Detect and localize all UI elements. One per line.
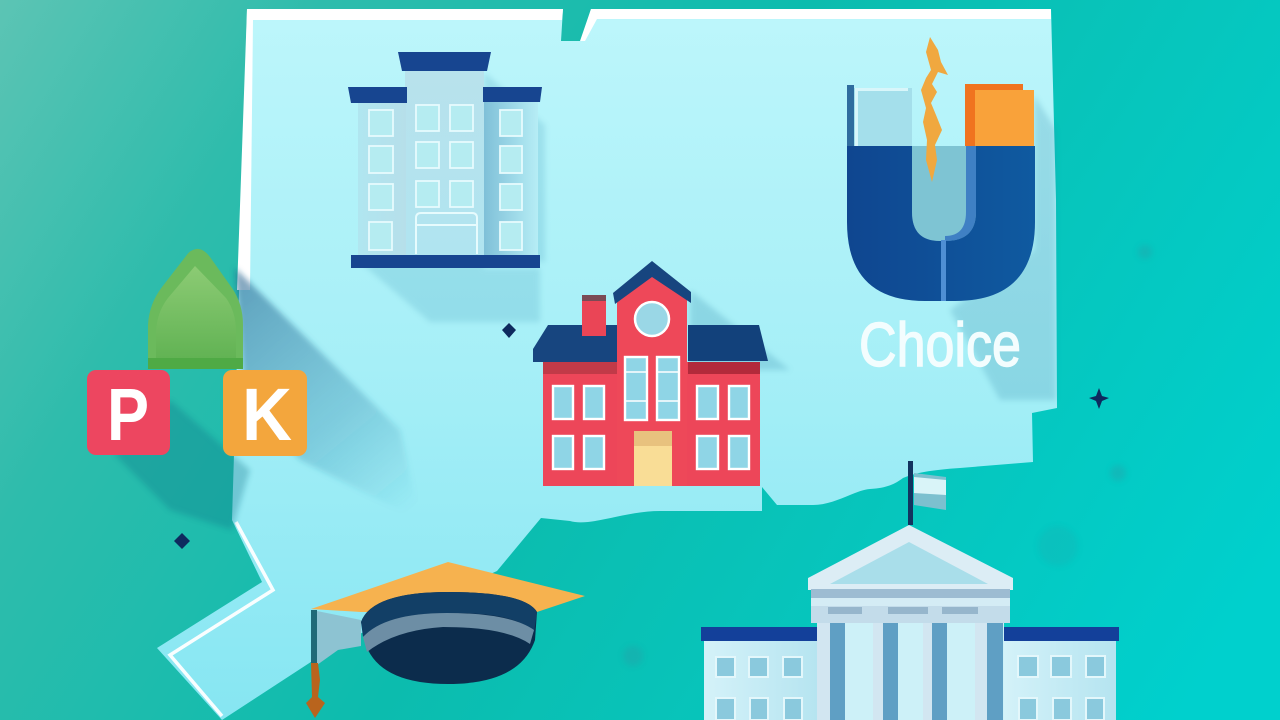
map highlight edges — [237, 9, 1051, 290]
icon: apartment building — [348, 52, 542, 268]
background specks — [623, 245, 1152, 666]
icon: flag — [908, 461, 946, 525]
icon: graduation cap — [306, 562, 585, 718]
map of the state — [157, 9, 1057, 720]
icon: capitol building — [701, 525, 1119, 720]
shadow: green leaf — [235, 268, 420, 520]
icon: green leaf — [148, 249, 243, 369]
icon: K block — [223, 370, 307, 456]
shadow: building — [360, 72, 545, 322]
icon: school building — [533, 261, 768, 486]
icon: magnet — [847, 37, 1035, 301]
icon: K block: K — [242, 373, 292, 456]
shadow: letter blocks — [115, 400, 250, 530]
decorative diamonds — [174, 323, 1109, 549]
shadow: magnet — [950, 95, 1056, 400]
icon: tassel — [306, 663, 325, 718]
icon: lightning spark — [921, 37, 948, 182]
label: Choice: Choice — [859, 311, 1021, 380]
shadow: school — [690, 290, 790, 370]
icon: P block: P — [107, 373, 149, 456]
icon: P block — [87, 370, 170, 456]
